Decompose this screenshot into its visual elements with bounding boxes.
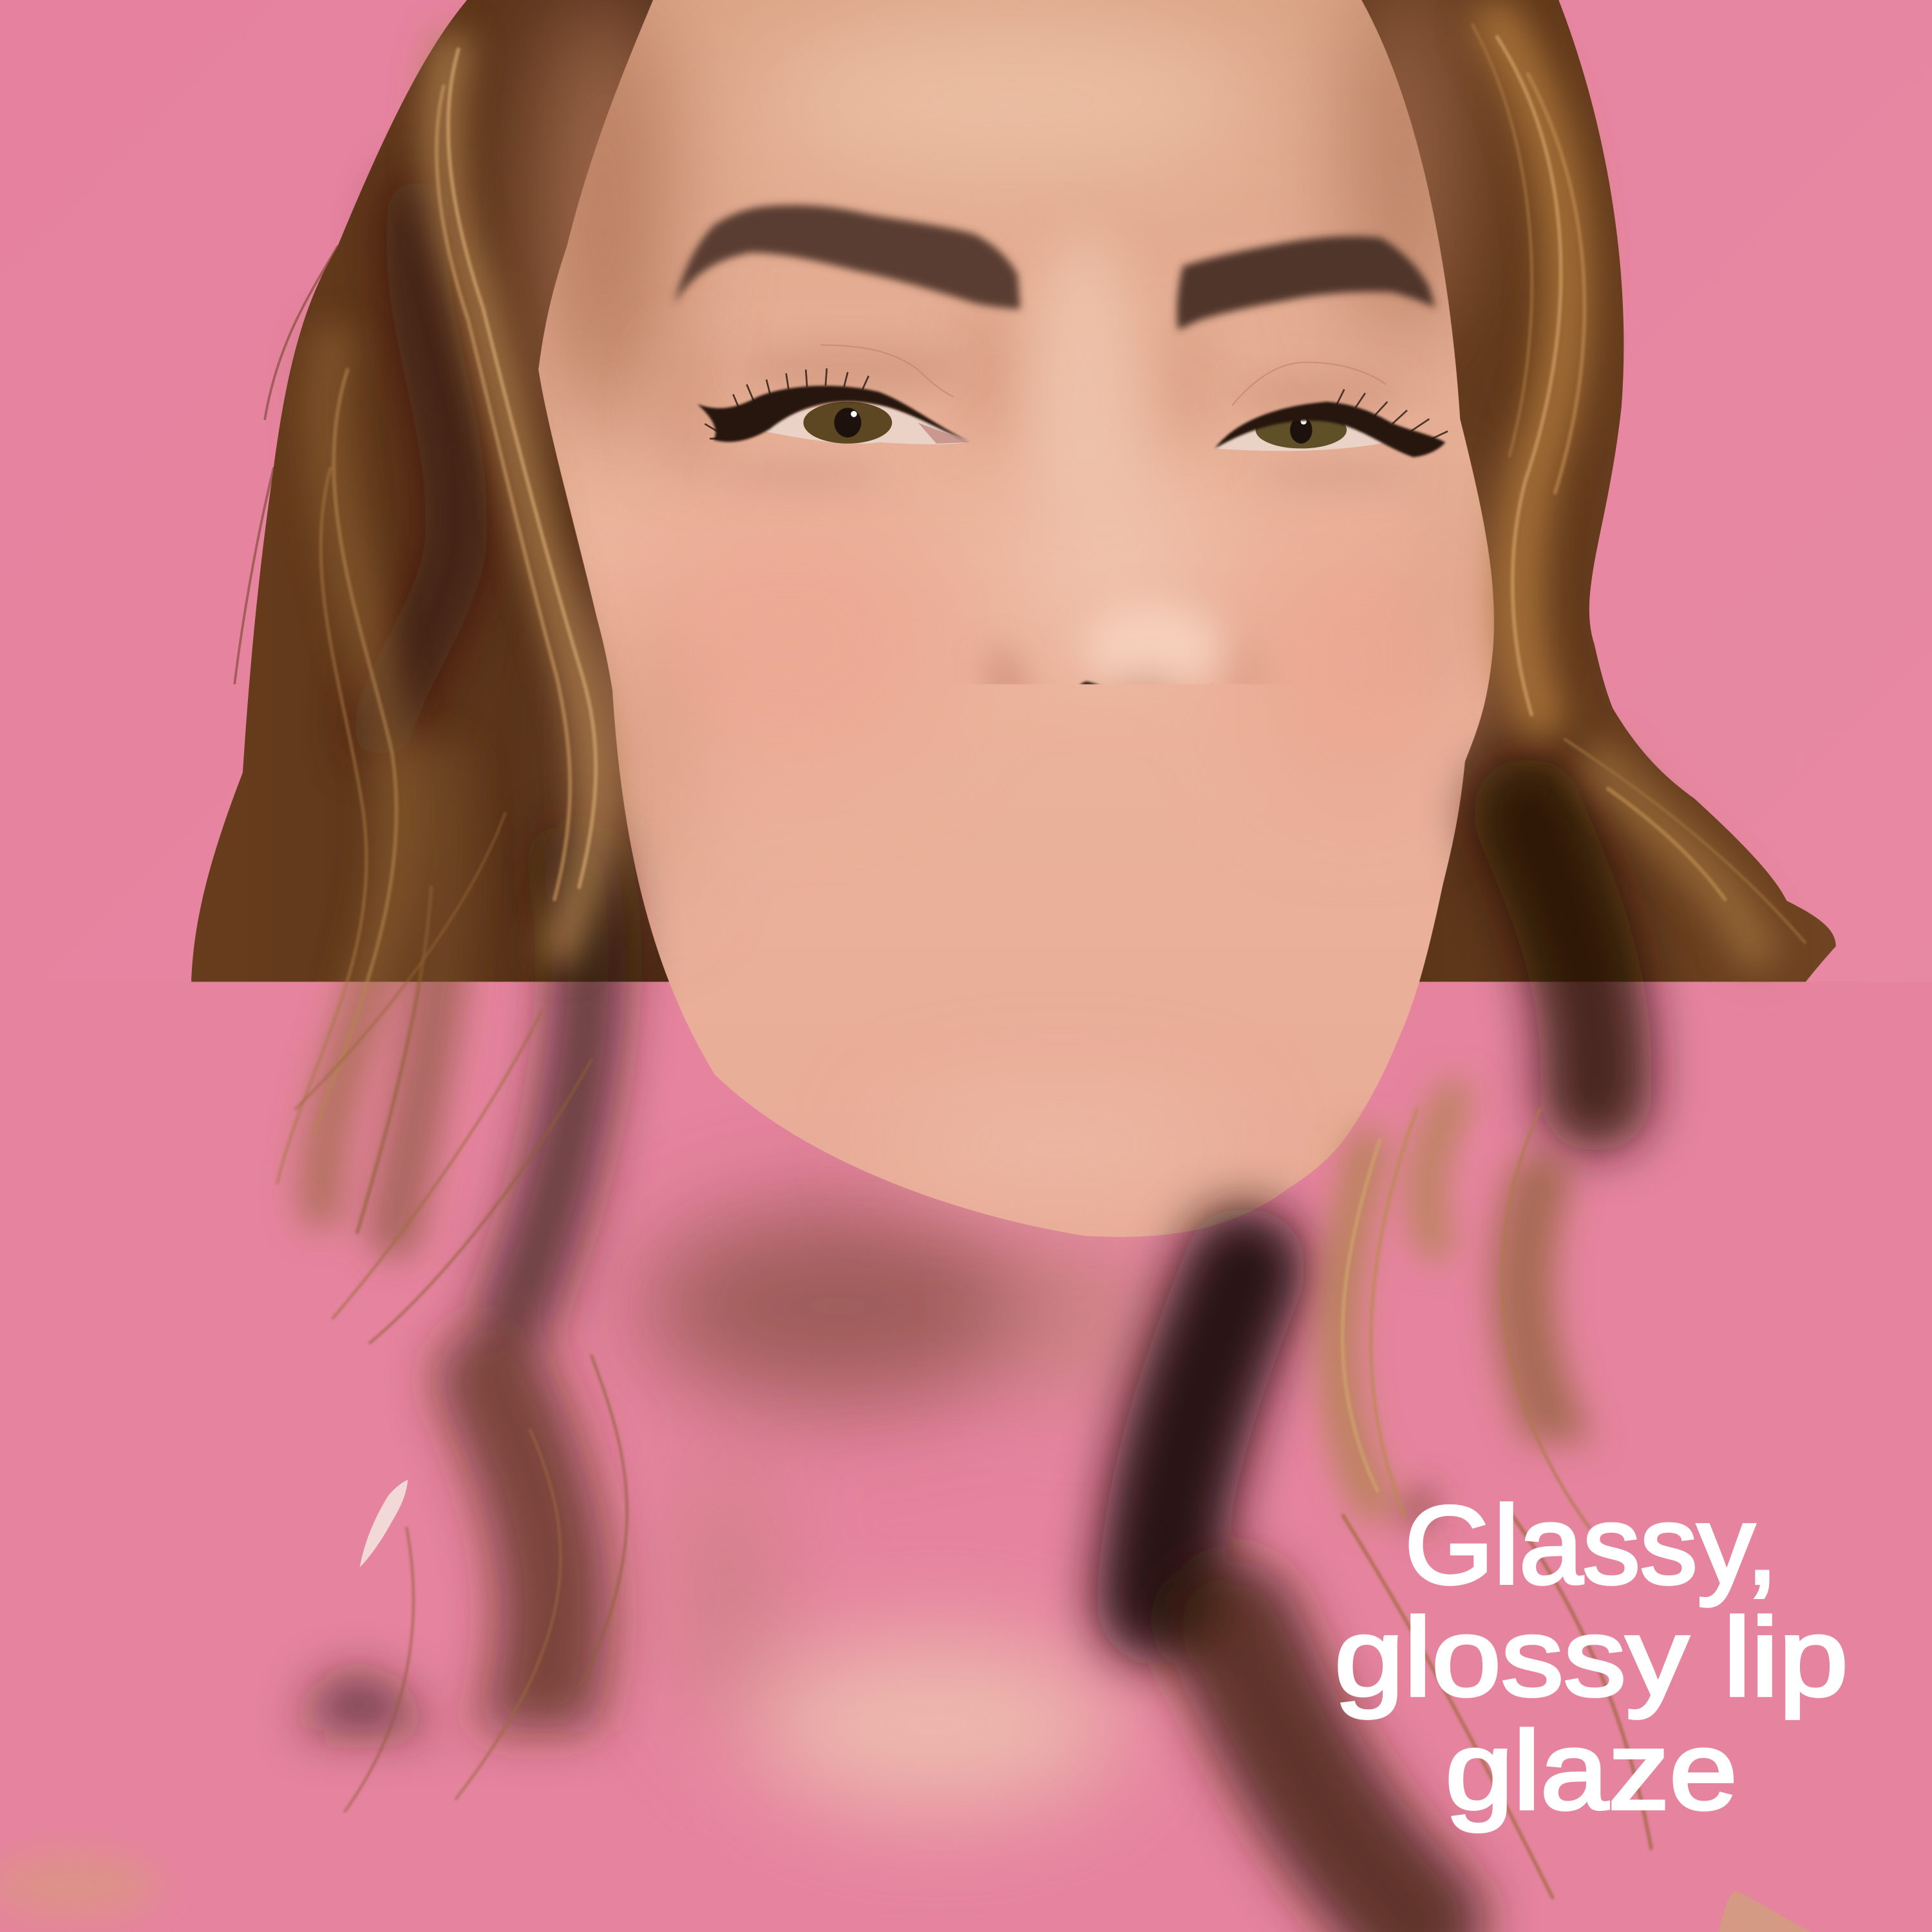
hair: soft tone bands [320,24,1756,1897]
garment [0,1442,113,1836]
lip shadow [1059,998,1257,1028]
tube: product type: Treatment [401,1196,506,1294]
face: nose bridge and brow bone [653,234,1214,505]
tube: brand name: MCoBeauty. [495,864,768,1144]
tube: shade: Fairy Floss [382,1225,466,1304]
nail: thumb [360,1480,408,1567]
hair: fine golden strands [277,24,1805,1897]
lip: gloss sparkles [1080,821,1271,960]
eye: right crease [1232,362,1386,405]
eyes [697,343,1448,487]
nose shading [1001,603,1259,795]
brow: right [1177,236,1435,330]
finger: ring [0,1523,140,1616]
finger: little [0,1762,35,1861]
hair: flyaway wisps [182,247,1841,1497]
eye shadow [715,343,1417,487]
nail: ring [54,1539,140,1582]
eye: right [1215,390,1448,457]
web between fingers and thumb [175,1472,252,1540]
nostril: right [1180,685,1213,727]
product: lip treatment tube [220,772,876,1518]
tube: cap [220,1344,388,1518]
tube: crimped end [697,772,876,924]
hair: right side [986,0,1836,1932]
tube: product name: Peptide Lip [417,1166,525,1267]
face shape [538,0,1494,1237]
headline: Glassy, glossy lip glaze [1334,1484,1848,1833]
hair: left side [108,0,862,1932]
nail: middle [140,1499,247,1565]
brows [674,205,1435,330]
brow: left [674,205,1020,309]
neck shadow [641,1208,1158,1811]
eye: left [697,368,970,444]
nostril: left [1072,681,1129,732]
tube: body [293,802,850,1417]
lip: crease and gloss [1047,821,1284,992]
nail: index [155,1361,258,1411]
hair: dark soft volumes [357,209,1596,1922]
hand: thumb [0,1463,408,1932]
face shading [542,0,1479,1189]
hand: fingers behind tube [0,1361,263,1861]
nose [1001,603,1259,795]
neck and chest [579,1084,1282,1932]
lips [1005,803,1287,1028]
shoulder [1719,1890,1811,1932]
thumb: shading [0,1851,160,1920]
headline line 2: glossy lip [1334,1596,1848,1719]
face [538,0,1494,1237]
finger: middle [0,1480,247,1593]
headline line 1: Glassy, [1405,1484,1778,1607]
lip: lower [1040,897,1285,1001]
eye: left crease [820,345,954,397]
finger: index [8,1368,263,1510]
tube: weight: 15g / 0.52 oz [346,1279,422,1349]
headline line 3: glaze [1445,1709,1738,1833]
lip: upper [1024,803,1287,909]
lip corner [1005,909,1057,911]
palm [0,1589,160,1769]
